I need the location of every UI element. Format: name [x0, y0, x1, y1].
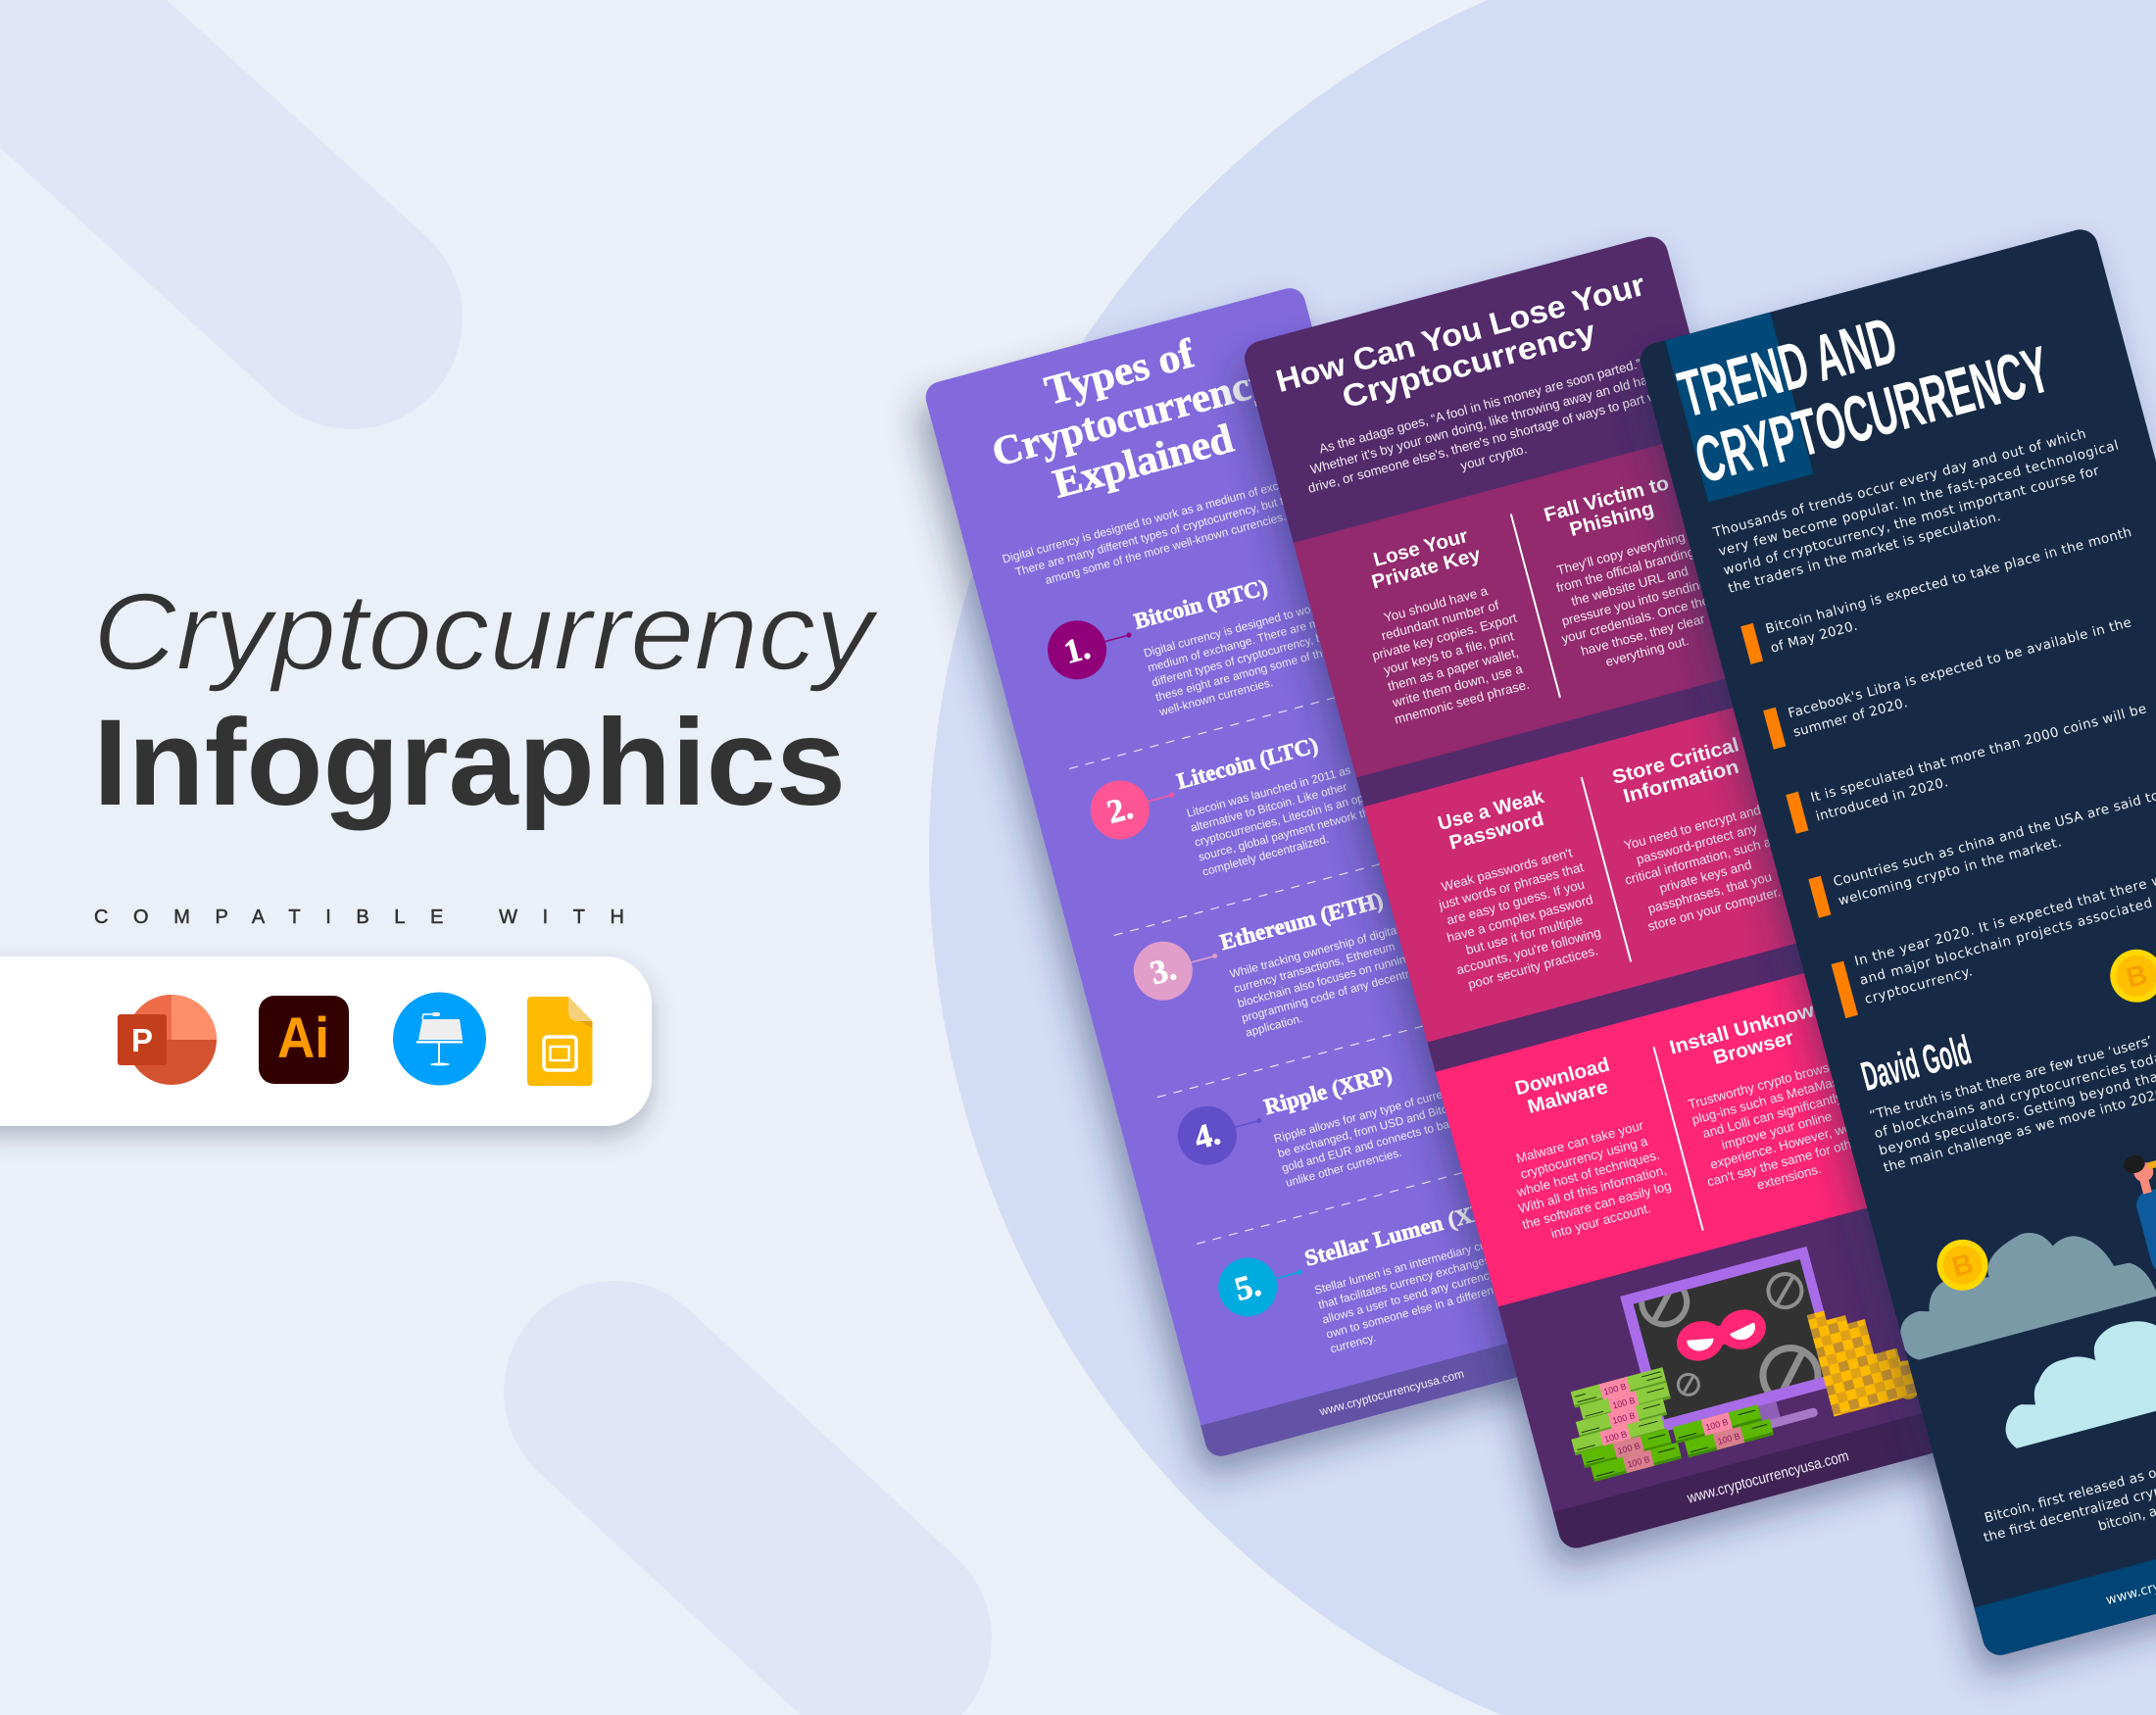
section: malware and unknown browser: can't say the same for other: [1705, 1134, 1865, 1190]
section: weak password and critical information: Information: [1621, 757, 1741, 808]
item: ripple: Ripple allows for any type of currency to: [1272, 1079, 1474, 1146]
item: ethereum: [1127, 873, 1444, 1063]
intro text: the traders in the market is speculation.: [1727, 509, 2002, 597]
section: private key and phishing: You should have a: [1382, 583, 1490, 625]
heading: types of cryptocurrency explained: Cryptocurrency: [988, 359, 1275, 476]
item: bitcoin: well-known currencies.: [1157, 675, 1274, 719]
intro text: drive, or someone else's, there's no shortage of ways to part with: [1306, 384, 1672, 496]
section: malware and unknown browser: Trustworthy crypto browser: [1687, 1056, 1842, 1111]
bullet: blockchain projects: cryptocurrency.: [1863, 963, 1974, 1007]
item: bitcoin: Bitcoin (BTC): [1131, 574, 1270, 634]
section: weak password and critical information: have a complex password: [1446, 892, 1594, 945]
section: weak password and critical information: just words or phrases that: [1437, 859, 1586, 912]
section: private key and phishing: Lose Your: [1371, 525, 1471, 571]
intro text: among some of the more well-known currencies.: [1044, 510, 1288, 587]
item: ethereum: currency transactions, Ethereum: [1232, 939, 1396, 996]
item: ethereum: programming code of any decentralized: [1240, 959, 1440, 1025]
intro text: [1298, 351, 1677, 513]
icon: coin: [2104, 944, 2156, 1008]
section: malware and unknown browser: the software can easily log: [1521, 1178, 1673, 1232]
section: malware and unknown browser: experience. However, we: [1708, 1120, 1853, 1172]
item: litecoin: alternative to Bitcoin. Like other: [1189, 780, 1348, 835]
bullet: new coins: It is speculated that more than 2000 coins will be: [1809, 701, 2148, 806]
panel: how can you lose your cryptocurrency: [1241, 233, 1986, 1552]
intro text: Whether it's by your own doing, like throwing away an old hard: [1308, 369, 1660, 477]
item: bitcoin: 1.: [1060, 630, 1094, 671]
section: malware and unknown browser: Download: [1513, 1054, 1612, 1100]
item: ripple: Ripple (XRP): [1261, 1061, 1395, 1119]
section: malware and unknown browser: With all of this information,: [1517, 1162, 1668, 1216]
section: private key and phishing: from the official branding: [1554, 544, 1696, 595]
item: litecoin: [1084, 715, 1392, 903]
bullet: facebook libra: summer of 2020.: [1791, 695, 1909, 741]
item: litecoin: source, global payment network that's: [1197, 801, 1388, 864]
item: ripple: [1171, 1038, 1486, 1214]
money bundles: 100 B: [1704, 1417, 1730, 1433]
bullet: bitcoin halving: of May 2020.: [1769, 618, 1859, 657]
section: malware and unknown browser: whole host of techniques.: [1514, 1148, 1661, 1200]
item: ethereum: 3.: [1147, 951, 1180, 992]
heading: Cryptocurrency: [1339, 314, 1599, 415]
section: private key and phishing: your keys to a file, print: [1382, 628, 1516, 677]
section: weak password and critical information: store on your computer.: [1646, 884, 1783, 934]
panel: trend and cryptocurrency: [1636, 225, 2156, 1659]
section: weak password and critical information: Weak passwords aren't: [1440, 845, 1574, 894]
compatible with label: COMPATIBLE WITH: [94, 906, 624, 928]
quote: “The truth is that there are few true ‘users’: [1868, 1033, 2154, 1124]
heading: How Can You Lose Your: [1272, 267, 1648, 399]
section: malware and unknown browser: Malware: [1525, 1076, 1610, 1118]
section: malware and unknown browser: Browser: [1711, 1027, 1796, 1069]
icon: coin: B: [2123, 959, 2151, 995]
intro text: There are many different types of cryptocurrency, but these: [1013, 487, 1309, 579]
section: private key and phishing: pressure you into sending: [1560, 576, 1708, 629]
item: litecoin: cryptocurrencies, Litecoin is an open-: [1193, 787, 1382, 850]
quote author: David Gold: [1856, 1026, 1976, 1100]
item: litecoin: completely decentralized.: [1200, 832, 1330, 879]
icon: Keynote: [393, 992, 486, 1086]
bullet: new coins: introduced in 2020.: [1814, 774, 1950, 825]
title: Infographics: [93, 695, 846, 831]
icon: PowerPoint: P: [131, 1022, 153, 1058]
section: private key and phishing: the website URL and: [1570, 564, 1690, 609]
section: malware and unknown browser: improve your online: [1720, 1108, 1834, 1152]
icon: Illustrator: [259, 996, 349, 1084]
bullet: countries: [1808, 780, 2156, 918]
bullet: countries: welcoming crypto in the market.: [1837, 834, 2063, 909]
heading: types of cryptocurrency explained: Types of: [1041, 331, 1200, 415]
item: bitcoin: medium of exchange. There are many: [1146, 611, 1339, 674]
section: weak password and critical information: You need to encrypt and: [1623, 803, 1762, 853]
section: malware and unknown browser: extensions.: [1755, 1161, 1823, 1193]
intro text: Digital currency is designed to work as a medium of exchange.: [1001, 469, 1314, 566]
money bundles: 100 B: [1603, 1429, 1628, 1445]
section: private key and phishing: your credentials. Once they: [1560, 591, 1717, 646]
item: ripple: 4.: [1191, 1115, 1224, 1156]
item: bitcoin: [1041, 551, 1363, 743]
section: weak password and critical information: private keys and: [1658, 858, 1753, 896]
heading: types of cryptocurrency explained: Explained: [1049, 416, 1238, 508]
item: litecoin: 2.: [1103, 790, 1137, 831]
section: malware and unknown browser: [1436, 958, 1921, 1306]
heading: types of cryptocurrency explained: [975, 314, 1288, 520]
section: private key and phishing: [1294, 429, 1779, 777]
section: private key and phishing: Fall Victim to: [1542, 472, 1671, 526]
compatibility panel: [0, 956, 652, 1126]
section: malware and unknown browser: into your account.: [1549, 1200, 1652, 1242]
icon: Google Slides: [527, 997, 592, 1086]
item: stellar lumen: Stellar lumen is an intermediary currency: [1313, 1230, 1519, 1298]
item: stellar lumen: Stellar Lumen (XLM): [1302, 1191, 1519, 1271]
item: stellar lumen: currency.: [1329, 1331, 1377, 1355]
section: weak password and critical information: [1364, 694, 1849, 1043]
item: bitcoin: Digital currency is designed to work as a: [1142, 593, 1346, 660]
quote: [1868, 1029, 2156, 1176]
bullet: facebook libra: Facebook's Libra is expected to be available in the: [1787, 614, 2133, 721]
intro text: Thousands of trends occur every day and out of which: [1711, 426, 2087, 541]
section: private key and phishing: everything out.: [1604, 633, 1690, 669]
section: private key and phishing: Private Key: [1369, 544, 1484, 594]
item: bitcoin: these eight are among some of the more: [1154, 637, 1359, 704]
section: weak password and critical information: but use it for multiple: [1464, 912, 1585, 957]
section: weak password and critical information: poor security practices.: [1466, 943, 1599, 992]
illustration: hacked monitor: [1570, 1247, 1917, 1482]
intro text: very few become popular. In the fast-paced technological: [1717, 437, 2120, 560]
money bundles: 100 B: [1716, 1431, 1741, 1446]
intro text: world of cryptocurrency, the most important course for: [1722, 463, 2101, 578]
item: ethereum: Ethereum (ETH): [1217, 888, 1386, 955]
footer url: www.cryptocurrencyusa.com: [1317, 1367, 1465, 1419]
title: Cryptocurrency: [93, 571, 880, 693]
intro text: [1711, 418, 2131, 597]
section: weak password and critical information: critical information, such as: [1623, 833, 1780, 888]
icon: Illustrator: Ai: [277, 1006, 329, 1070]
section: private key and phishing: write them down, use a: [1390, 661, 1525, 710]
section: weak password and critical information: are easy to guess. If you: [1446, 877, 1586, 928]
item: stellar lumen: 5.: [1231, 1267, 1264, 1308]
section: private key and phishing: have those, they clear: [1580, 612, 1707, 659]
item: litecoin: Litecoin was launched in 2011 as an: [1185, 759, 1368, 820]
illustration: clouds, coin and figure: B: [1949, 1249, 1977, 1284]
item: ripple: unlike other currencies.: [1284, 1146, 1403, 1190]
money bundles: 100 B: [1611, 1410, 1637, 1426]
intro text: your crypto.: [1459, 441, 1529, 473]
money bundles: 100 B: [1616, 1441, 1642, 1456]
section: malware and unknown browser: Malware can take your: [1514, 1117, 1645, 1166]
section: weak password and critical information: Use a Weak: [1436, 786, 1547, 835]
intro text: As the adage goes, “A fool in his money are soon parted.”: [1317, 356, 1642, 457]
title: [93, 571, 880, 831]
money bundles: 100 B: [1611, 1396, 1637, 1410]
money bundles: 100 B: [1602, 1382, 1628, 1396]
money bundles: 100 B: [1626, 1454, 1651, 1470]
item: stellar lumen: that facilitates currency exchanges. It: [1317, 1250, 1504, 1312]
section: weak password and critical information: accounts, you're following: [1455, 925, 1602, 977]
panel: types of cryptocurrency: [922, 284, 1589, 1459]
item: stellar lumen: own to someone else in a different: [1325, 1282, 1498, 1341]
section: malware and unknown browser: and Lolli can significantly: [1701, 1090, 1844, 1141]
section: malware and unknown browser: plug-ins such as MetaMask: [1690, 1072, 1847, 1127]
item: stellar lumen: [1212, 1186, 1542, 1380]
section: malware and unknown browser: cryptocurrency using a: [1519, 1134, 1649, 1182]
section: private key and phishing: private key copies. Export: [1370, 611, 1519, 663]
footer url: www.cryptocurrencyusa.com: [1685, 1447, 1850, 1507]
section: weak password and critical information: Password: [1446, 808, 1546, 855]
item: bitcoin: different types of cryptocurrency, but: [1151, 628, 1334, 689]
section: private key and phishing: They'll copy everything: [1555, 529, 1687, 577]
item: ripple: gold and EUR and connects to banks,: [1280, 1111, 1471, 1175]
section: weak password and critical information: Store Critical: [1610, 734, 1741, 789]
section: malware and unknown browser: Install Unknown: [1667, 997, 1829, 1059]
section: private key and phishing: Phishing: [1567, 498, 1656, 541]
bullet: blockchain projects: [1831, 855, 2156, 1018]
section: private key and phishing: mnemonic seed phrase.: [1393, 677, 1531, 727]
section: private key and phishing: redundant number of: [1380, 598, 1500, 643]
heading: TREND AND: [1672, 304, 1904, 432]
item: ethereum: blockchain also focuses on running the: [1236, 946, 1433, 1010]
section: weak password and critical information: password-protect any: [1635, 820, 1759, 867]
bullet: bitcoin halving: Bitcoin halving is expected to take place in the month: [1764, 524, 2133, 637]
item: litecoin: Litecoin (LTC): [1174, 732, 1321, 794]
bottom text: [1977, 1409, 2156, 1564]
illustration: clouds, coin and figure: [1900, 1154, 2156, 1448]
money bundles: [1559, 1344, 1774, 1486]
section: private key and phishing: them as a paper wallet,: [1386, 645, 1520, 694]
item: ripple: be exchanged, from USD and Bitcoin to: [1276, 1095, 1476, 1160]
item: ethereum: While tracking ownership of digital: [1228, 922, 1400, 981]
item: ethereum: application.: [1244, 1011, 1304, 1040]
section: weak password and critical information: passphrases, that you: [1646, 869, 1773, 916]
item: stellar lumen: allows a user to send any currency you: [1321, 1261, 1517, 1326]
icon: PowerPoint: [118, 995, 217, 1085]
